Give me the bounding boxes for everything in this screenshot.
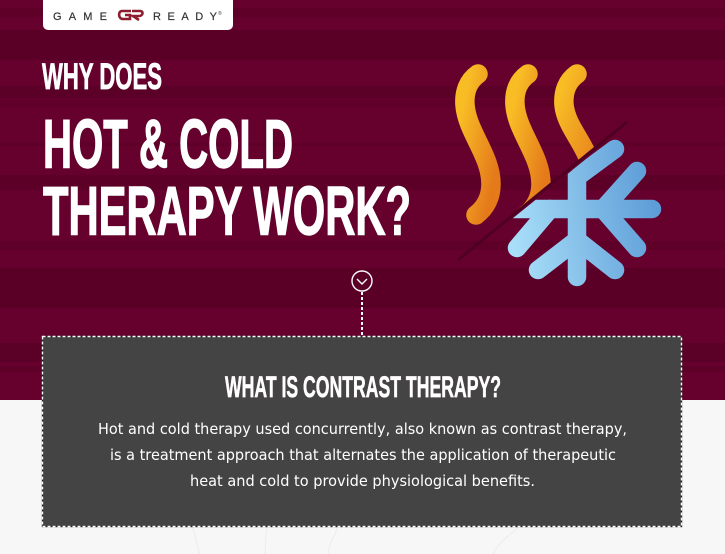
icon: heat waves [465, 74, 590, 215]
panel body text [98, 420, 627, 490]
title line: therapy work: THERAPY WORK? [43, 172, 411, 250]
title line: why does: WHY DOES [42, 56, 162, 97]
logo wordmark right: READY [153, 11, 218, 23]
logo plate [43, 0, 233, 30]
maroon header band [0, 0, 725, 400]
faint crack lines [192, 522, 522, 554]
registered mark: ® [218, 10, 222, 17]
arrow: circled chevron [352, 271, 372, 336]
panel heading: WHAT IS CONTRAST THERAPY? [225, 371, 501, 404]
icon: snowflake [500, 140, 652, 277]
icon: heat and cold [458, 74, 652, 277]
title line: hot and cold: HOT & COLD [43, 106, 293, 182]
panel body text: Hot and cold therapy used concurrently, also known as contrast therapy, [98, 420, 627, 438]
panel body text: heat and cold to provide physiological benefits. [190, 472, 535, 490]
logo wordmark left: GAME [53, 11, 107, 23]
panel: contrast therapy [42, 336, 682, 526]
logo mark [119, 11, 143, 20]
diagonal divider [458, 122, 627, 260]
panel body text: is a treatment approach that alternates the application of therapeutic [110, 446, 616, 464]
title [42, 56, 411, 250]
